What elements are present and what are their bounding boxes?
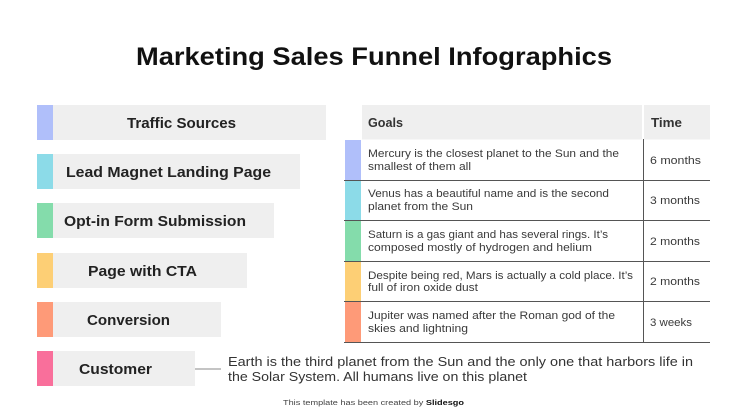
stage: Conversion xyxy=(37,302,221,337)
row: Jupiter: skies and lightning xyxy=(368,323,468,335)
callout: Earth: the Solar System. All humans live on this planet xyxy=(228,369,527,384)
stage: Traffic Sources xyxy=(37,105,326,140)
row: Venus xyxy=(368,188,701,213)
row: Mars: Despite being red, Mars is actually a cold place. It’s xyxy=(368,270,633,282)
row: Venus: Venus has a beautiful name and is the second xyxy=(368,188,609,200)
stage: Opt-in Form Submission: Opt-in Form Submission xyxy=(64,214,246,230)
stage: Lead Magnet Landing Page xyxy=(37,154,300,189)
row: Jupiter: Jupiter was named after the Roman god of the xyxy=(368,310,615,322)
row: Venus: 3 months xyxy=(650,195,701,207)
row: Mercury: Mercury is the closest planet to the Sun and the xyxy=(368,148,619,160)
stage: Lead Magnet Landing Page: Lead Magnet Landing Page xyxy=(66,165,271,181)
row: Venus: planet from the Sun xyxy=(368,201,473,213)
stage: Traffic Sources: Traffic Sources xyxy=(127,116,236,132)
row: Mars xyxy=(368,270,701,294)
row: Mercury xyxy=(368,148,702,173)
row: Saturn: 2 months xyxy=(650,236,701,248)
row: Jupiter xyxy=(368,310,693,335)
row: Saturn: composed mostly of hydrogen and helium xyxy=(368,242,592,254)
panel: funnel stages xyxy=(37,105,326,386)
row: Mercury: 6 months xyxy=(650,155,702,167)
row: Saturn: Saturn is a gas giant and has several rings. It’s xyxy=(368,229,608,241)
title: Marketing Sales Funnel Infographics xyxy=(136,43,612,71)
row: Jupiter: 3 weeks xyxy=(650,317,693,329)
callout: Earth: Earth is the third planet from the Sun and the only one that harbors life in xyxy=(228,354,693,369)
stage: Page with CTA xyxy=(37,253,247,288)
table header: Goals xyxy=(368,115,403,130)
table header xyxy=(362,105,710,140)
stage: Customer xyxy=(37,351,195,386)
callout: Earth xyxy=(228,354,693,384)
row: Mars: full of iron oxide dust xyxy=(368,282,478,294)
connector line xyxy=(195,368,221,370)
stage: Opt-in Form Submission xyxy=(37,203,274,238)
stage: Page with CTA: Page with CTA xyxy=(88,264,198,280)
credit: This template has been created by Slidesgo xyxy=(283,398,464,407)
stage: Conversion: Conversion xyxy=(87,313,170,329)
row: Mars: 2 months xyxy=(650,276,701,288)
panel: goals table xyxy=(344,105,710,342)
table header: Time xyxy=(651,115,682,130)
row: Mercury: smallest of them all xyxy=(368,161,471,173)
stage: Customer: Customer xyxy=(79,362,152,378)
row: Saturn xyxy=(368,229,701,254)
row colour strips xyxy=(345,140,361,342)
